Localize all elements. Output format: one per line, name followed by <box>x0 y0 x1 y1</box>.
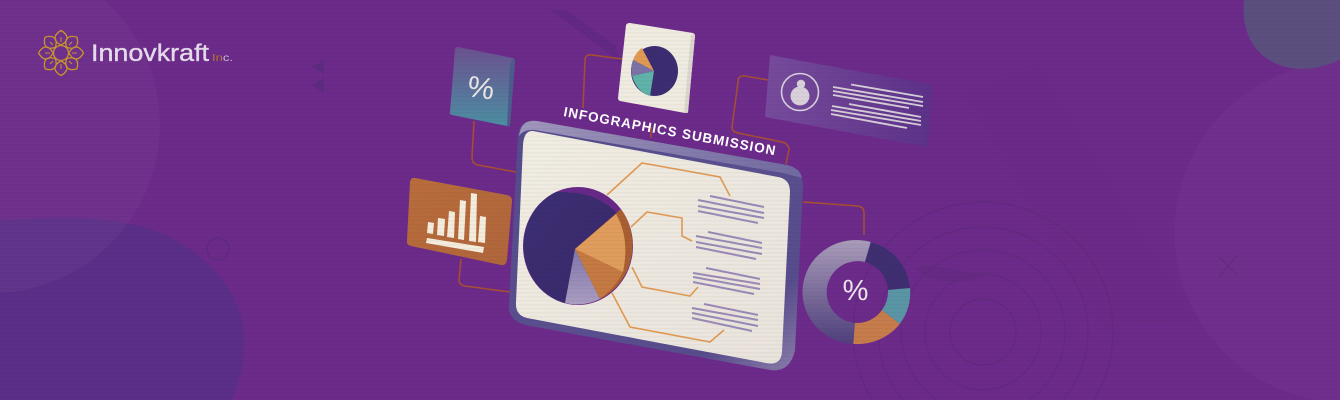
text tile <box>765 55 932 147</box>
orange connector lines <box>607 163 730 342</box>
donut percent symbol: % <box>843 275 868 307</box>
donut chart <box>802 240 910 344</box>
pie dark slice <box>524 192 617 303</box>
decorative cross <box>1219 255 1237 277</box>
decorative ring <box>207 238 229 260</box>
pie base <box>523 187 633 305</box>
tile edge <box>507 58 515 126</box>
panel text lines <box>692 196 764 331</box>
donut dark segment <box>865 242 910 290</box>
pie orange slice <box>575 214 625 272</box>
small pie chart <box>631 46 678 96</box>
pie document card <box>618 23 695 113</box>
bar chart tile <box>407 178 512 265</box>
small pie grey slice <box>631 60 654 76</box>
bars <box>426 193 486 253</box>
background blob: bottom left <box>0 218 244 400</box>
donut orange segment <box>853 310 900 344</box>
donut grey segment <box>802 240 871 344</box>
card body <box>618 23 695 113</box>
small pie teal slice <box>632 71 654 96</box>
logo wordmark: Innovkraft <box>91 40 209 67</box>
card edge <box>684 34 695 113</box>
main panel <box>509 121 803 370</box>
donut teal segment <box>882 288 910 324</box>
connector lines <box>459 55 864 292</box>
panel frame top highlight <box>519 121 802 178</box>
title: INFOGRAPHICS SUBMISSION <box>562 104 777 158</box>
background band <box>960 60 1200 330</box>
profile icon <box>782 74 818 110</box>
pie light slice <box>565 249 600 304</box>
percent symbol: % <box>465 70 496 107</box>
pie rim <box>575 209 633 299</box>
small pie orange slice <box>633 48 654 71</box>
decorative smudge near donut <box>915 266 985 282</box>
background blob: top right <box>1244 0 1340 69</box>
logo <box>38 30 233 76</box>
large pie chart <box>523 187 633 305</box>
logo flower icon <box>38 30 84 76</box>
background blob: top left <box>0 0 160 293</box>
tile text lines <box>831 84 923 128</box>
decorative streak <box>550 10 622 65</box>
decorative triangles <box>312 60 324 93</box>
tile body <box>765 55 932 147</box>
tile body <box>450 47 515 126</box>
panel frame <box>509 121 803 370</box>
radar circles <box>853 202 1113 400</box>
percent tile <box>450 47 515 126</box>
background blob: right circle <box>1175 62 1340 400</box>
logo suffix: In c. <box>212 53 233 64</box>
tile body <box>407 178 512 265</box>
pie mid orange slice <box>575 249 623 299</box>
panel screen <box>516 131 790 364</box>
